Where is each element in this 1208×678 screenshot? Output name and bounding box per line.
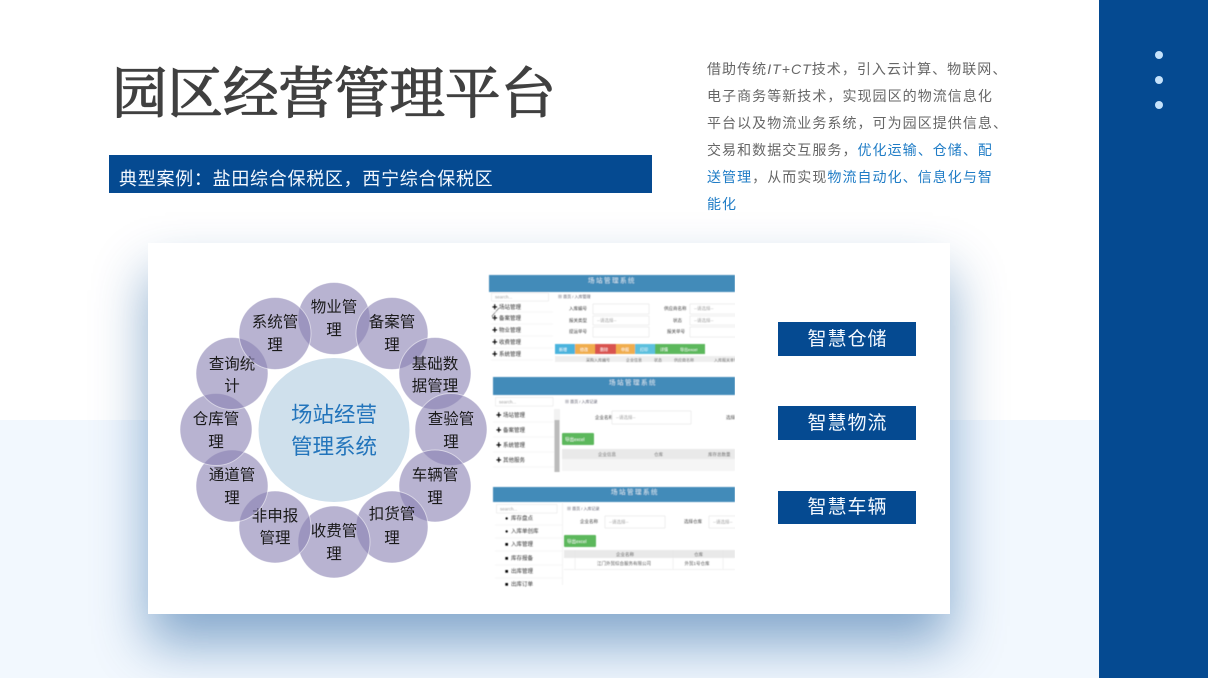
center circle: 场站经营: [291, 403, 377, 427]
screenshot 1: entry management: 报关类型: [569, 317, 587, 324]
screenshot 2: warehouse entry list: 仓库: [654, 451, 663, 458]
sidebar dot 3: [1155, 101, 1163, 109]
screenshot 1: entry management: ✚: [492, 315, 498, 322]
screenshot 2: warehouse entry list: 备案管理: [503, 426, 526, 434]
screenshot 1: entry management: --请选择--: [694, 317, 714, 324]
screenshot 1: entry management: ✚: [492, 351, 498, 358]
screenshot 2: warehouse entry list: 库存总数量: [708, 451, 731, 458]
description paragraph: 送管理，从而实现物流自动化、信息化与智: [707, 169, 993, 185]
screenshot 3: inventory list: 出库管理: [511, 567, 534, 575]
petal: 扣货管理: 理: [384, 530, 400, 547]
petal: 基础数据管理: 据管理: [412, 377, 458, 395]
sidebar dot 1: [1155, 51, 1163, 59]
screenshot 3: inventory list: 库存报备: [511, 554, 534, 562]
system screenshots: [488, 274, 735, 588]
screenshot 1: entry management: 系统管理: [499, 350, 522, 358]
petal: 通道管理: 通道管: [209, 466, 255, 484]
screenshot 3: inventory list: 出库订单: [511, 580, 534, 588]
center circle: [258, 358, 410, 502]
petal: 备案管理: [356, 298, 428, 370]
screenshot 3: inventory list: --请选择--: [609, 518, 629, 526]
screenshot 3: inventory list: 江门外贸综合服务有限公司: [597, 560, 651, 567]
description paragraph: 平台以及物流业务系统，可为园区提供信息、: [707, 115, 1008, 131]
screenshot 1: entry management: 报关单号: [667, 328, 685, 335]
screenshot 3: inventory list: 库存盘点: [511, 514, 534, 522]
screenshot 2: warehouse entry list: ✚: [496, 457, 502, 464]
screenshot 2: warehouse entry list: 场站管理系统: [609, 378, 657, 386]
screenshot 3: inventory list: 仓库: [694, 551, 703, 558]
screenshot 3: inventory list: 企业名称: [580, 518, 598, 525]
screenshot 1: entry management: 删除: [600, 346, 608, 352]
screenshot 3: inventory list: 外贸1号仓库: [684, 560, 710, 567]
screenshot 2: warehouse entry list: ✚: [496, 427, 502, 434]
petal: 仓库管理: [180, 394, 252, 466]
screenshot 1: entry management: ✚: [492, 304, 498, 311]
petal: 查验管理: [415, 394, 487, 466]
screenshot 3: inventory list: 场站管理系统: [611, 487, 659, 496]
screenshot 2: warehouse entry list: 系统管理: [503, 441, 526, 449]
screenshot 1: entry management: 供应商名称: [664, 305, 687, 312]
screenshot 1: entry management: --请选择--: [694, 305, 714, 312]
screenshot 2: warehouse entry list: ✚: [496, 442, 502, 449]
petal: 扣货管理: [356, 491, 428, 563]
petal: 备案管理: 备案管: [369, 313, 415, 331]
petal: 车辆管理: [399, 450, 471, 522]
screenshot 1: entry management: 状态: [673, 317, 682, 323]
petal: 非申报管理: [239, 491, 311, 563]
radial diagram: [180, 282, 487, 578]
screenshot 1: entry management: 导出excel: [680, 346, 697, 352]
screenshot 1: entry management: 修改: [580, 346, 588, 352]
screenshot 1: entry management: 申报: [621, 346, 629, 352]
petal: 查询统计: 计: [224, 377, 240, 395]
right sidebar: [1099, 0, 1208, 678]
petal: 收费管理: 理: [326, 546, 342, 563]
tag: 智慧仓储: [778, 322, 916, 356]
screenshot 3: inventory list: 入库管理: [511, 540, 534, 548]
tag: 智慧车辆: [778, 491, 916, 524]
petal: 查询统计: [196, 338, 268, 410]
screenshot 1: entry management: 状态: [654, 356, 662, 362]
screenshot 3: inventory list: ■: [505, 556, 508, 562]
center circle: 管理系统: [291, 435, 377, 459]
petal: 查验管理: 理: [443, 434, 459, 451]
petal: 查验管理: 查验管: [428, 410, 474, 428]
screenshot 3: inventory list: ■: [505, 582, 508, 588]
screenshot 2: warehouse entry list: 企业信息: [598, 451, 616, 458]
petal: 系统管理: 理: [267, 337, 283, 354]
title: 园区经营管理平台: [112, 65, 556, 126]
screenshot 1: entry management: 物业管理: [499, 326, 522, 334]
petal: 通道管理: [196, 450, 268, 522]
screenshot 2: warehouse entry list: 导出excel: [565, 436, 585, 443]
tag: 智慧物流: 智慧物流: [807, 413, 888, 434]
petal: 仓库管理: 理: [208, 434, 224, 451]
screenshot 1: entry management: 详情: [660, 346, 668, 352]
description paragraph: 交易和数据交互服务，优化运输、仓储、配: [707, 142, 993, 158]
screenshot 2: warehouse entry list: search...: [499, 400, 516, 404]
description paragraph: 电子商务等新技术，实现园区的物流信息化: [707, 88, 993, 104]
petal: 物业管理: 物业管: [311, 298, 357, 316]
screenshot 2: warehouse entry list: ▦ 首页 / 入库记录: [565, 398, 597, 404]
description paragraph: [707, 61, 1008, 212]
screenshot 1: entry management: 场站管理系统: [588, 276, 636, 284]
screenshot 1: entry management: 入库编号: [569, 305, 587, 312]
screenshot 3: inventory list: ●: [505, 516, 508, 522]
petal: 车辆管理: 车辆管: [412, 466, 458, 484]
screenshot 1: entry management: --请选择--: [597, 317, 617, 324]
screenshot 1: entry management: 提运单号: [569, 328, 587, 335]
screenshot 3: inventory list: [493, 487, 739, 588]
screenshot 1: entry management: 企业信息: [626, 356, 642, 362]
petal: 收费管理: [298, 506, 370, 578]
petal: 系统管理: 系统管: [252, 313, 298, 331]
screenshot 1: entry management: ✚: [492, 339, 498, 346]
screenshot 3: inventory list: --请选择--: [713, 518, 733, 526]
screenshot 3: inventory list: ●: [505, 529, 508, 535]
screenshot 1: entry management: 采购入库编号: [586, 356, 610, 362]
screenshot 3: inventory list: 入库单创库: [511, 527, 539, 535]
petal: 通道管理: 理: [224, 490, 240, 507]
background band: [0, 420, 1099, 678]
petal: 收费管理: 收费管: [311, 522, 357, 540]
petal: 非申报管理: 非申报: [252, 507, 298, 525]
petal: 备案管理: 理: [384, 337, 400, 354]
screenshot 3: inventory list: search...: [500, 506, 517, 512]
screenshot 2: warehouse entry list: [493, 377, 744, 472]
screenshot 2: warehouse entry list: 企业名称: [595, 414, 613, 421]
screenshot 3: inventory list: 导出excel: [567, 538, 587, 545]
tag: 智慧物流: [778, 406, 916, 440]
screenshot 3: inventory list: ■: [505, 569, 508, 575]
screenshot 1: entry management: 收费管理: [499, 338, 522, 346]
screenshot 1: entry management: 备案管理: [499, 314, 522, 322]
screenshot 2: warehouse entry list: 场站管理: [503, 411, 526, 419]
tag: 智慧仓储: 智慧仓储: [807, 329, 888, 350]
description paragraph: 能化: [707, 196, 737, 212]
screenshot 2: warehouse entry list: ✚: [496, 412, 502, 419]
petal: 基础数据管理: [399, 338, 471, 410]
screenshot 3: inventory list: ▦ 首页 / 入库记录: [567, 505, 599, 511]
screenshot 1: entry management: 打印: [640, 346, 648, 352]
petal: 物业管理: [298, 282, 370, 354]
screenshot 3: inventory list: 选择仓库: [684, 518, 702, 525]
subtitle banner: [109, 155, 652, 193]
screenshot 1: entry management: 供应商名称: [674, 356, 694, 362]
screenshot 1: entry management: ▦ 首页 / 入库管理: [558, 293, 590, 299]
petal: 系统管理: [239, 298, 311, 370]
description paragraph: 借助传统IT+CT技术，引入云计算、物联网、: [707, 61, 1007, 77]
petal: 扣货管理: 扣货管: [369, 505, 415, 523]
screenshot 1: entry management: 场站管理: [499, 303, 522, 311]
screenshot 1: entry management: [489, 275, 740, 362]
white card with shadow: [148, 243, 950, 614]
petal: 基础数据管理: 基础数: [412, 355, 459, 373]
screenshot 1: entry management: 新增: [559, 346, 567, 352]
petal: 非申报管理: 管理: [259, 529, 291, 547]
screenshot 1: entry management: ✚: [492, 327, 498, 334]
screenshot 3: inventory list: ■: [505, 542, 508, 548]
petal: 物业管理: 理: [326, 322, 342, 339]
screenshot 3: inventory list: 企业名称: [616, 551, 634, 558]
tag: 智慧车辆: 智慧车辆: [807, 497, 888, 518]
petal: 仓库管理: 仓库管: [193, 410, 239, 428]
screenshot 1: entry management: search...: [495, 294, 512, 300]
petal: 车辆管理: 理: [427, 490, 443, 507]
screenshot 2: warehouse entry list: 其他服务: [503, 456, 526, 464]
sidebar dot 2: [1155, 76, 1163, 84]
screenshot 2: warehouse entry list: --请选择--: [616, 414, 636, 421]
petal: 查询统计: 查询统: [209, 355, 255, 373]
subtitle banner: 典型案例：盐田综合保税区，西宁综合保税区: [119, 169, 493, 189]
